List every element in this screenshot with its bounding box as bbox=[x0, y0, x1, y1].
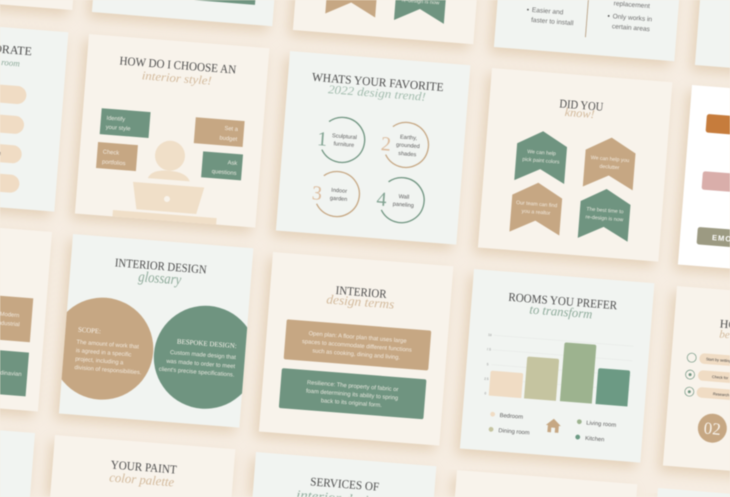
card: left favorite list bbox=[0, 18, 68, 218]
box: open plan: such as cooking, dining and living. bbox=[312, 348, 401, 361]
bar chart bbox=[483, 333, 634, 407]
circle: scope: The amount of work that bbox=[76, 340, 139, 351]
banner: best time to re-design: The best time to bbox=[586, 206, 624, 215]
banner: declutter bbox=[583, 136, 637, 190]
circle: scope: SCOPE: bbox=[78, 326, 101, 335]
legend: Kitchen bbox=[585, 436, 605, 443]
icon: house bbox=[545, 418, 561, 433]
tag: set a budget bbox=[194, 117, 245, 147]
circle: scope: project, including a bbox=[75, 357, 124, 366]
banner: find a realtor bbox=[509, 181, 563, 235]
box: open plan bbox=[284, 319, 431, 371]
circle: bespoke design: Custom made design that bbox=[170, 350, 236, 361]
trend 4: wall paneling bbox=[375, 176, 426, 224]
card: top cropped pros and cons: certain areas bbox=[612, 23, 651, 33]
legend: Dining room bbox=[498, 428, 530, 437]
script subtitle: 2022 design trend! bbox=[328, 82, 426, 104]
card: right checklist bbox=[658, 286, 730, 486]
card: rooms you prefer to transform bbox=[455, 269, 654, 469]
tag: set a budget: budget bbox=[219, 136, 238, 143]
tag: ask questions: Ask bbox=[227, 160, 238, 167]
circle: scope: is agreed in a specific bbox=[76, 348, 132, 358]
trend 2: earthy grounded shades: grounded bbox=[396, 142, 420, 150]
tag: check portfolios bbox=[96, 142, 138, 171]
banner: declutter: declutter bbox=[599, 164, 620, 171]
tag: check portfolios: portfolios bbox=[102, 159, 126, 167]
card: right checklist: Check for bbox=[712, 375, 729, 380]
circle: bespoke design: was made to order to meet bbox=[165, 359, 236, 370]
tag: ask questions: questions bbox=[211, 169, 237, 177]
tag: identify your style bbox=[100, 108, 151, 138]
title: ROOMS YOU PREFER bbox=[508, 290, 618, 312]
title: INTERIOR DESIGN bbox=[114, 255, 207, 277]
trend 1: sculptural furniture: 1 bbox=[316, 128, 328, 151]
banner: best time to re-design: re-design is now bbox=[585, 214, 624, 223]
trend 3: indoor garden: garden bbox=[330, 196, 347, 203]
paint title: YOUR PAINT bbox=[110, 457, 178, 477]
paint title: color palette bbox=[109, 469, 175, 489]
card: left design styles: Modern bbox=[0, 312, 20, 319]
box: open plan: Open plan: A floor plan that uses large bbox=[308, 331, 407, 345]
trend 2: earthy grounded shades: shades bbox=[398, 151, 417, 158]
card: interior design glossary bbox=[46, 233, 266, 435]
paint title bbox=[109, 457, 178, 490]
box: open plan: spaces to accommodate different functions bbox=[302, 339, 412, 354]
trend 4: wall paneling: Wall bbox=[398, 194, 409, 201]
tag: check portfolios: Check bbox=[103, 149, 119, 157]
card: bottom right cropped mint bbox=[653, 488, 730, 497]
card: top cropped pros and cons bbox=[489, 0, 688, 67]
bar chart: 7.5 bbox=[486, 347, 491, 352]
script subtitle: interior style! bbox=[141, 68, 212, 88]
banner: pick paint colors bbox=[514, 129, 568, 184]
title: WHATS YOUR FAVORITE bbox=[311, 70, 444, 94]
card: left bottom cropped mint bbox=[0, 430, 35, 497]
circle: bespoke design: client's precise specifications. bbox=[159, 367, 235, 379]
trend 3: indoor garden: Indoor bbox=[331, 188, 347, 195]
script subtitle: to transform bbox=[529, 302, 593, 321]
trend 1: sculptural furniture: Sculptural bbox=[332, 133, 357, 141]
script subtitle: design terms bbox=[326, 291, 395, 312]
title: HOW DO I CHOOSE AN bbox=[119, 53, 237, 77]
legend: Living room bbox=[586, 420, 617, 429]
box: resilience: Resilience: The property of fabric or bbox=[307, 380, 399, 393]
title: INTERIOR bbox=[335, 283, 387, 301]
icon: person at laptop bbox=[112, 137, 222, 225]
trend 2: earthy grounded shades bbox=[379, 121, 430, 169]
card: whats your favorite design trend bbox=[271, 51, 470, 251]
trend 1: sculptural furniture: furniture bbox=[333, 141, 354, 149]
trend 3: indoor garden bbox=[310, 170, 361, 218]
card: top cropped pros and cons: Easier and bbox=[532, 7, 564, 16]
box: resilience: back to its original form. bbox=[321, 398, 382, 409]
trend 2: earthy grounded shades: Earthy, bbox=[400, 134, 418, 142]
legend: Bedroom bbox=[499, 413, 523, 421]
card: top cropped pros and cons: replacement bbox=[613, 0, 650, 10]
trend 1: sculptural furniture bbox=[315, 116, 366, 164]
banner: pick paint colors: pick paint colors bbox=[522, 157, 560, 166]
card: top right cropped mint bbox=[690, 0, 730, 85]
card: emotional colour swatches bbox=[673, 85, 730, 285]
bar chart: 10 bbox=[488, 333, 492, 337]
card: right checklist: Research bbox=[713, 392, 729, 397]
banner: find a realtor: Our team can find bbox=[516, 200, 558, 209]
circle: bespoke design bbox=[153, 305, 248, 410]
card: right checklist: 02 bbox=[703, 419, 722, 439]
circle: scope: division of responsibilities. bbox=[74, 365, 142, 376]
banner: declutter: We can help you bbox=[591, 155, 630, 164]
trend 4: wall paneling: paneling bbox=[392, 202, 414, 209]
card: bottom cropped cream bbox=[451, 470, 637, 497]
card: left design styles bbox=[0, 217, 52, 417]
services title: SERVICES OF bbox=[310, 474, 380, 494]
card: top cropped pros and cons: faster to install bbox=[531, 17, 574, 27]
card: your paint color palette bbox=[46, 435, 235, 497]
card: services of interior design bbox=[249, 452, 436, 497]
card: right checklist: be bbox=[719, 328, 730, 341]
card: top cropped pros and cons: Only works in bbox=[612, 13, 653, 23]
banner: best time to re-design bbox=[578, 187, 632, 242]
trend 4: wall paneling: 4 bbox=[376, 188, 387, 211]
card: top left cropped cream bbox=[0, 0, 86, 16]
banner: find a realtor: you a realtor bbox=[521, 208, 551, 217]
card: top cropped mint bbox=[87, 0, 286, 32]
trend 2: earthy grounded shades: 2 bbox=[380, 133, 392, 156]
tag: ask questions bbox=[201, 151, 243, 180]
bar chart: 2.5 bbox=[484, 377, 489, 381]
card: interior design terms bbox=[254, 252, 453, 452]
script subtitle: glossary bbox=[138, 269, 182, 289]
circle: bespoke design: BESPOKE DESIGN: bbox=[177, 337, 237, 350]
tag: identify your style: Identify bbox=[106, 116, 125, 123]
title: DID YOU bbox=[559, 96, 604, 114]
banner: pick paint colors: We can help bbox=[527, 149, 556, 157]
circle: scope bbox=[61, 297, 154, 400]
trend 3: indoor garden: 3 bbox=[311, 182, 323, 205]
script subtitle: know! bbox=[564, 105, 595, 121]
box: resilience bbox=[279, 368, 426, 419]
tag: identify your style: your style bbox=[105, 125, 131, 133]
card: how do I choose an interior style bbox=[70, 34, 269, 234]
card: did you know bbox=[473, 68, 672, 268]
tag: set a budget: Set a bbox=[224, 126, 239, 133]
card: top cropped banners bbox=[288, 0, 487, 50]
bar chart: 0 bbox=[484, 391, 487, 395]
box: resilience: foam determining its ability to spring bbox=[306, 389, 398, 402]
legend bbox=[488, 412, 617, 444]
bar chart: 5 bbox=[487, 362, 489, 366]
